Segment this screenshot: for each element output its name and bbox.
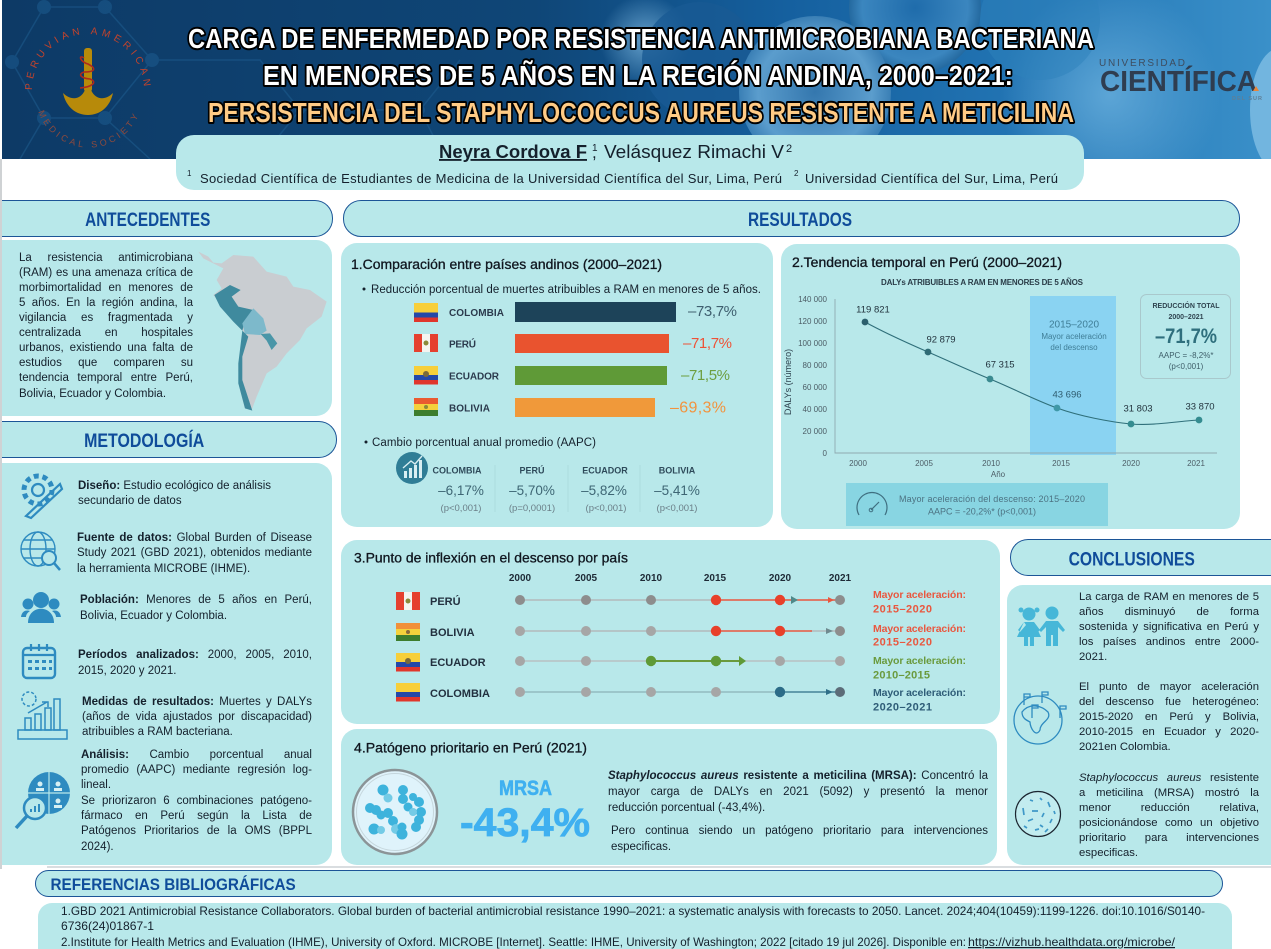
text: antecedentes: morbimortalidad en menores de [19, 282, 193, 294]
AAPC table: ECUADOR [582, 466, 628, 476]
AAPC table: (p<0,001) [657, 503, 697, 514]
title: EN MENORES DE 5 AÑOS EN LA REGIÓN ANDINA, 2000–2021: [263, 60, 1013, 91]
text: análisis: fármaco en Perú según la Lista de [81, 810, 312, 822]
text: conclusión 1: 2021. [1079, 650, 1107, 662]
AAPC table: PERÚ [519, 464, 545, 476]
line chart: 92 879 [926, 334, 956, 346]
panel 2: tendencia temporal en Perú [781, 244, 1240, 529]
callout: reducción total: –71,7% [1155, 325, 1217, 348]
line chart: 43 696 [1052, 390, 1082, 400]
heading: conclusiones [1010, 539, 1271, 576]
year axis: 2020 [769, 573, 792, 584]
line chart: 100 000 [798, 339, 828, 348]
chart subtitle: DALYs ATRIBUIBLES A RAM EN MENORES DE 5 AÑOS [881, 278, 1084, 287]
text: antecedentes: 5 años. En la región andina, la [19, 297, 193, 309]
row: Perú: Mayor aceleración: [873, 589, 966, 601]
text: antecedentes: urbanos, existiendo una falta de [19, 342, 193, 354]
text: medidas de resultados: (años de vida ajustados por discapacidad) [82, 710, 312, 722]
icon: petri dish with MRSA [353, 770, 437, 854]
row: Ecuador: –71,5% [681, 367, 730, 384]
row: Bolivia [396, 623, 966, 648]
row: Perú: 2015–2020 [873, 604, 932, 616]
row: Colombia: 2020–2021 [873, 702, 932, 714]
heading: resultados: RESULTADOS [748, 210, 852, 231]
text: antecedentes: Bolivia, Ecuador y Colombia. [19, 388, 166, 400]
icon: pie chart with magnifier [16, 772, 70, 828]
authors: 1 [592, 143, 598, 154]
line chart: 2005 [915, 459, 933, 468]
text: diseño: Diseño: Estudio ecológico de análisis [78, 480, 271, 492]
line chart [783, 295, 1217, 479]
text: conclusión 3: prioritario para intervenciones [1079, 832, 1259, 844]
stat: MRSA -43,4%: MRSA [499, 777, 552, 800]
AAPC table: (p<0,001) [586, 503, 626, 514]
text: conclusión 2: del descenso fue heterogéneo: [1079, 696, 1259, 708]
text: fuente de datos: Study 2021 (GBD 2021), obtenidos mediante [77, 547, 312, 559]
row: Perú [414, 334, 732, 353]
year axis [509, 573, 852, 584]
line chart: 2010 [982, 459, 1000, 468]
logo: Peruvian American Medical Society [25, 28, 151, 148]
text: conclusión 1: sostenida y significativa en Perú y [1079, 620, 1259, 632]
callout: reducción total: AAPC = -8,2%* [1159, 351, 1213, 360]
row: Perú: PERÚ [449, 338, 476, 350]
text: conclusión 1: los países andinos entre 2000- [1079, 636, 1259, 648]
line chart: 2000 [849, 459, 867, 468]
panel 4: patógeno prioritario [341, 729, 997, 865]
text: medidas de resultados: atribuibles a RAM bacteriana. [82, 726, 233, 738]
text: MRSA description: mayor carga de DALYs en 2021 (5092) y presentó la menor [608, 786, 988, 798]
row: Ecuador: Mayor aceleración: [873, 655, 966, 667]
AAPC table: (p=0,0001) [509, 503, 555, 514]
affiliations: Universidad Científica del Sur, Lima, Perú [805, 171, 1058, 186]
icon: bar chart with ruler [18, 692, 67, 739]
text: medidas de resultados [82, 696, 312, 738]
row: Ecuador [414, 366, 730, 385]
text: conclusión 1: años disminuyó de forma [1079, 606, 1259, 618]
header banner [2, 0, 1271, 159]
line chart: del descenso [1050, 343, 1098, 352]
logo: Universidad Científica del Sur: DEL SUR [1232, 96, 1262, 102]
text: diseño [78, 480, 271, 506]
row: Colombia: –73,7% [688, 303, 737, 320]
text: antecedentes: estudios que comparen su [19, 357, 193, 369]
icon: bacteria circle [1016, 792, 1060, 836]
text: análisis: Se priorizaron 6 combinaciones patógeno- [81, 795, 312, 807]
AAPC table: COLOMBIA [432, 466, 482, 476]
row: Colombia [414, 302, 737, 322]
panel title: 2.Tendencia temporal en Perú (2000–2021) [792, 255, 1062, 270]
text: población: Bolivia, Ecuador y Colombia. [80, 610, 227, 622]
title: CARGA DE ENFERMEDAD POR RESISTENCIA ANTIMICROBIANA BACTERIANA [188, 23, 1094, 54]
panel: metodología [2, 463, 332, 865]
AAPC table: –5,70% [509, 483, 555, 498]
panel 1: comparación entre países andinos [341, 243, 773, 527]
text: fuente de datos: la herramienta MICROBE (IHME). [77, 562, 250, 574]
panel title: 1.Comparación entre países andinos (2000–2021) [351, 257, 662, 272]
line chart: 2015–2020 [1049, 320, 1099, 330]
callout: reducción total: REDUCCIÓN TOTAL [1152, 301, 1220, 310]
line chart: DALYs (número) [783, 349, 793, 415]
heading: antecedentes [2, 200, 333, 237]
text: conclusión 2: El punto de mayor aceleración [1079, 680, 1259, 692]
authors and affiliations [176, 135, 1084, 190]
logo: Peruvian American Medical Society: PERUVIAN AMERICAN [25, 28, 151, 90]
map of South America [198, 252, 326, 411]
text: fuente de datos: Fuente de datos: Global Burden of Disease [77, 532, 312, 544]
stat: MRSA -43,4% [460, 777, 590, 845]
affiliations [187, 169, 1058, 186]
icon: globe with magnifier [21, 532, 60, 570]
text: conclusión 3: posicionándose como un objetivo [1079, 816, 1259, 828]
text: análisis [81, 748, 312, 853]
icon: gear and pen [24, 476, 62, 518]
line chart: Mayor aceleración [1041, 332, 1107, 341]
row: Perú: –71,7% [683, 335, 732, 352]
row: Bolivia: BOLIVIA [430, 627, 475, 639]
text: conclusión 2: 2015-2020 en Perú y Bolivia, [1079, 711, 1259, 723]
line chart: 119 821 [856, 304, 890, 316]
panel: conclusiones [1007, 585, 1271, 865]
stat: MRSA -43,4%: -43,4% [460, 801, 590, 845]
line chart: Año [991, 470, 1006, 479]
heading: resultados [343, 200, 1240, 237]
text: conclusión 1: La carga de RAM en menores de 5 [1079, 590, 1259, 602]
text: prioridad: especificas. [611, 840, 671, 852]
row: Colombia: Mayor aceleración: [873, 687, 966, 699]
AAPC table: (p<0,001) [441, 503, 481, 514]
heading: metodología [2, 421, 337, 458]
panel title: 4.Patógeno prioritario en Perú (2021) [354, 740, 587, 756]
line chart: 2021 [1187, 459, 1205, 468]
text: conclusión 2: 2021en Colombia. [1079, 741, 1171, 753]
text: diseño: secundario de datos [78, 494, 182, 506]
callout: reducción total: 2000–2021 [1168, 314, 1204, 321]
reference 1 [61, 904, 1205, 933]
text: población [80, 594, 312, 622]
panel title: 3.Punto de inflexión en el descenso por país [354, 550, 628, 566]
text: conclusión 3: menor reducción relativa, [1079, 802, 1259, 814]
line chart: 2015 [1052, 459, 1070, 468]
heading: referencias bibliográficas [35, 870, 1223, 897]
logo: Universidad Científica del Sur: CIENTÍFICA [1100, 64, 1257, 98]
row: Colombia: COLOMBIA [430, 688, 490, 700]
row: Bolivia: 2015–2020 [873, 636, 932, 648]
text: conclusión 1 [1079, 590, 1260, 662]
text: población: Población: Menores de 5 años en Perú, [80, 594, 312, 606]
AAPC table: –6,17% [438, 483, 484, 498]
row: Bolivia [414, 398, 726, 417]
year axis: 2000 [509, 573, 532, 584]
heading: referencias bibliográficas: REFERENCIAS BIBLIOGRÁFICAS [51, 875, 296, 894]
AAPC table: –5,82% [581, 483, 627, 498]
text: conclusión 3 [1079, 772, 1260, 858]
callout: mayor aceleración: Mayor aceleración del descenso: 2015–2020 [899, 494, 1085, 504]
text: antecedentes: centralizada en hospitales [19, 327, 193, 339]
text: MRSA description: reducción porcentual (-43,4%). [608, 802, 765, 814]
row: Colombia [396, 683, 966, 714]
callout: reducción total [1140, 294, 1230, 378]
text: análisis: 2024). [81, 841, 114, 853]
molecular hexagon pattern [5, 0, 460, 159]
row: Ecuador: 2010–2015 [873, 670, 930, 682]
year axis: 2021 [829, 573, 852, 584]
icon: globe with pins [1014, 692, 1066, 744]
title: PERSISTENCIA DEL STAPHYLOCOCCUS AUREUS RESISTENTE A METICILINA [208, 97, 1074, 128]
row: Perú: PERÚ [430, 595, 461, 608]
bullet: reducción porcentual: Reducción porcentual de muertes atribuibles a RAM en menores de 5 años. [371, 284, 761, 296]
row: Bolivia: Mayor aceleración: [873, 623, 966, 635]
text: conclusión 2 [1079, 680, 1259, 753]
affiliations: 2 [794, 169, 799, 178]
text: períodos analizados: 2015, 2020 y 2021. [78, 664, 176, 676]
callout: mayor aceleración: AAPC = -20,2%* (p<0,001) [928, 506, 1036, 516]
text: conclusión 2: 2010-2015 en Ecuador y 2020- [1079, 726, 1259, 738]
line chart: 120 000 [798, 317, 828, 326]
line chart: 20 000 [803, 427, 828, 436]
panel: referencias [38, 903, 1232, 949]
text: prioridad [611, 824, 988, 852]
icon: growth chart [396, 452, 428, 484]
authors: , [592, 143, 597, 162]
title [188, 23, 1094, 128]
text: MRSA description: Staphylococcus aureus resistente a meticilina (MRSA): Concentró la [608, 770, 988, 782]
row: Bolivia: –69,3% [670, 400, 726, 416]
row: Bolivia: BOLIVIA [449, 404, 490, 414]
AAPC table: –5,41% [654, 483, 700, 498]
reference 1: 6736(24)01867-1 [61, 919, 154, 933]
icon: children [1017, 606, 1065, 646]
text: períodos analizados: Períodos analizados: 2000, 2005, 2010, [78, 648, 312, 660]
callout: mayor aceleración [846, 483, 1108, 526]
reference 1: 1.GBD 2021 Antimicrobial Resistance Collaborators. Global burden of bacterial antimicrobial resistance 1990–2021: a systematic analysis with forecasts to 2050. Lancet. 2024;404(10459):1199-1226. doi:10.1016/S0140- [61, 904, 1205, 918]
AAPC table [432, 464, 700, 514]
authors: Neyra Cordova F [439, 141, 587, 162]
heading: metodología: METODOLOGÍA [84, 430, 205, 452]
year axis: 2010 [640, 573, 663, 584]
icon: calendar [23, 644, 55, 678]
text: fuente de datos [77, 532, 312, 574]
line chart: 60 000 [803, 383, 828, 392]
text: períodos analizados [78, 648, 312, 676]
row: Ecuador [396, 653, 966, 682]
line chart: 2020 [1122, 459, 1140, 468]
reference 2: 2.Institute for Health Metrics and Evaluation (IHME), University of Oxford. MICROBE [Internet]. Seattle: IHME, University of Washington; 2022 [citado 19 jul 2026]. Disponible en: [61, 935, 966, 949]
heading: antecedentes: ANTECEDENTES [85, 210, 210, 231]
bullet: AAPC: Cambio porcentual anual promedio (AAPC) [372, 437, 596, 449]
line chart: 0 [823, 449, 828, 458]
text: análisis: Patógenos Prioritarios de la OMS (BPPL [81, 825, 312, 837]
panel 3: punto de inflexión [341, 540, 1000, 724]
year axis: 2005 [575, 573, 598, 584]
text: conclusión 3: Staphylococcus aureus resistente [1079, 772, 1259, 784]
line chart: 33 870 [1185, 402, 1215, 412]
icon: people [21, 592, 61, 623]
row: Colombia: COLOMBIA [449, 308, 504, 319]
text: análisis: lineal. [81, 779, 111, 791]
logo: Universidad Científica del Sur: UNIVERSIDAD [1099, 58, 1185, 69]
callout: reducción total: (p<0,001) [1169, 362, 1204, 371]
text: antecedentes: vigilancia es fragmentada y [19, 312, 193, 324]
text: análisis: Análisis: Cambio porcentual anual [81, 748, 312, 760]
affiliations: Sociedad Científica de Estudiantes de Medicina de la Universidad Científica del Sur, Lima, Perú [200, 171, 782, 186]
line chart: 80 000 [803, 361, 828, 370]
text: medidas de resultados: Medidas de resultados: Muertes y DALYs [82, 696, 312, 708]
text: MRSA description [608, 770, 988, 814]
row: Perú [396, 589, 966, 616]
text: antecedentes [19, 252, 193, 400]
text: conclusión 3: a meticilina (MRSA) mostró la [1079, 786, 1259, 798]
text: conclusión 3: especificas. [1079, 846, 1138, 858]
panel: antecedentes [2, 240, 332, 416]
text: análisis: promedio (AAPC) mediante regresión log- [81, 764, 312, 776]
affiliations: 1 [187, 169, 192, 178]
line chart: 40 000 [803, 405, 828, 414]
logo: Peruvian American Medical Society: MEDICAL SOCIETY [38, 110, 138, 148]
year axis: 2015 [704, 573, 727, 584]
row: Ecuador: ECUADOR [430, 657, 486, 669]
authors [439, 141, 792, 162]
heading: conclusiones: CONCLUSIONES [1069, 550, 1195, 571]
authors: 2 [786, 143, 792, 155]
text: antecedentes: tendencia temporal entre Perú, [19, 372, 193, 384]
AAPC table: BOLIVIA [659, 466, 696, 476]
authors: Velásquez Rimachi V [604, 141, 785, 162]
divider [47, 866, 1271, 868]
reference 2: https://vizhub.healthdata.org/microbe/ [968, 935, 1176, 949]
line chart: 140 000 [798, 295, 828, 304]
text: antecedentes: (RAM) es una amenaza crítica de [19, 267, 193, 279]
row: Ecuador: ECUADOR [449, 372, 500, 382]
left edge line [0, 159, 2, 869]
line chart: 31 803 [1123, 404, 1153, 414]
text: antecedentes: La resistencia antimicrobiana [19, 252, 193, 264]
background cells [600, 0, 1271, 205]
text: prioridad: Pero continua siendo un patógeno prioritario para intervenciones [611, 824, 988, 836]
line chart: 67 315 [985, 360, 1015, 370]
